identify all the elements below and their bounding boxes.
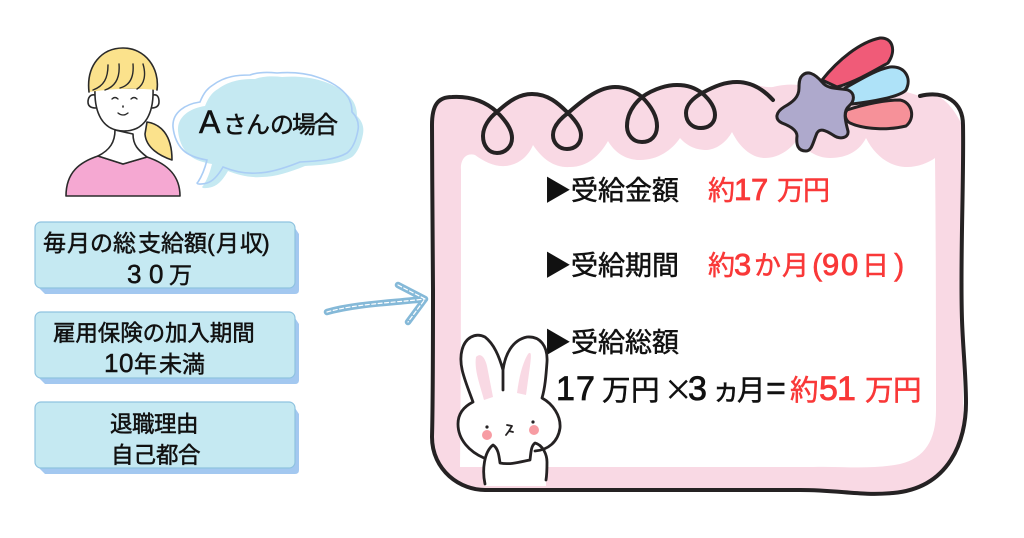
text: total benefit: ▶ (544, 328, 571, 358)
text: benefit period: 3 (734, 247, 751, 282)
text: total benefit: 受給総額 (571, 328, 679, 358)
text: benefit period: 約 (708, 251, 735, 281)
info box: insurance period: 年未満 (134, 351, 205, 377)
text: total benefit: = (766, 370, 786, 408)
info box: insurance period (35, 312, 299, 384)
info box: reason for leaving: 退職理由 (110, 412, 199, 437)
bubble label: さんの場合 (223, 112, 338, 139)
text: total benefit: 万円 (865, 375, 922, 407)
text: benefit period: 90 (822, 247, 858, 282)
icon: shooting star (777, 38, 912, 151)
text: benefit period: 受給期間 (571, 251, 679, 281)
text: total benefit: 51 (819, 370, 856, 408)
text: benefit amount: 17 (734, 172, 768, 207)
info box: monthly pay: ( (207, 230, 215, 256)
info box: reason for leaving (35, 402, 299, 474)
text: total benefit (544, 328, 922, 409)
info box: monthly pay: 万 (169, 262, 192, 288)
text: benefit amount: 約 (708, 176, 735, 206)
text: total benefit: × (664, 368, 693, 409)
text: benefit period (544, 247, 904, 282)
text: total benefit: 万円 (602, 375, 660, 407)
text: benefit amount: 万円 (777, 176, 830, 206)
text: benefit period: 日 (862, 251, 889, 281)
info box: monthly pay: 月収 (216, 230, 263, 256)
text: benefit amount (544, 172, 830, 207)
text: total benefit: 約 (790, 375, 819, 407)
frame pink band (432, 82, 963, 493)
speech bubble (173, 72, 363, 188)
info box: monthly pay (35, 222, 299, 294)
text: benefit period: ) (894, 247, 904, 282)
info box: insurance period: 10 (104, 348, 133, 378)
text: benefit amount: 受給金額 (571, 176, 679, 206)
text: total benefit: 17 (556, 370, 595, 408)
illustration: woman (66, 48, 180, 196)
text: benefit amount: ▶ (544, 176, 571, 206)
text: total benefit: 3 (688, 370, 707, 408)
illustration: rabbit (458, 335, 560, 486)
info box: reason for leaving: 自己都合 (111, 443, 201, 468)
panel: result frame (432, 82, 966, 494)
info box: monthly pay: 毎月の総支給額 (43, 230, 207, 256)
text: benefit period: ▶ (544, 251, 571, 281)
frame outline with loops (432, 82, 773, 290)
text: benefit period: ( (812, 247, 823, 282)
text: total benefit: ヵ月 (712, 375, 766, 407)
info box: monthly pay: 30 (127, 259, 163, 289)
text: benefit period: か月 (754, 251, 809, 281)
info box: monthly pay: ) (262, 230, 270, 256)
bubble label: A (199, 104, 221, 140)
arrow (327, 285, 425, 322)
info box: insurance period: 雇用保険の加入期間 (53, 321, 255, 346)
